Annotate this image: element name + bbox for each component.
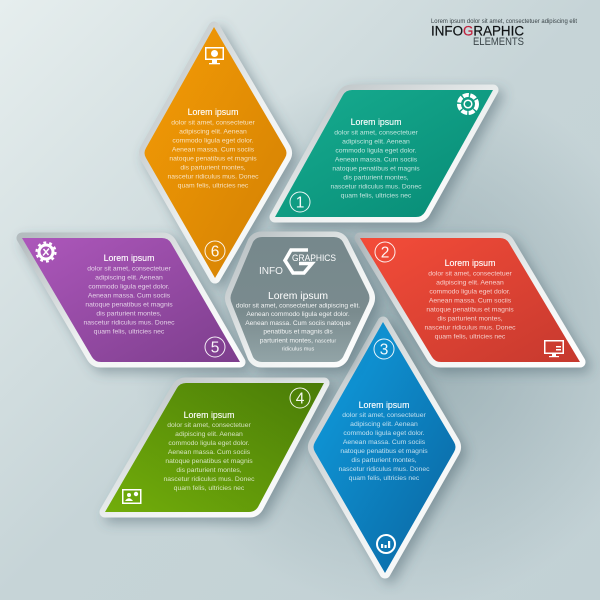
text: purple: dis parturient montes, [96,310,162,318]
text: green: quam felis, ultricies nec [174,485,245,492]
number 1: 1 [296,194,304,212]
number 1 [290,192,310,212]
text: teal: dis parturient montes, [343,174,409,182]
icon: monitor [205,47,224,64]
text: red: Lorem ipsum [445,258,495,268]
text: blue: nascetur ridiculus mus. Donec [338,466,430,473]
panel 6: orange diamond [144,27,286,278]
header tagline: Lorem ipsum dolor sit amet, consectetuer adipiscing elit [431,18,577,25]
text: purple [83,253,175,336]
text: blue: dis parturient montes, [351,457,417,464]
text: green: dolor sit amet, consectetuer [167,422,251,429]
header title: INFOGRAPHIC [431,24,524,38]
icon: cycle arrows [459,95,477,113]
text: purple: commodo ligula eget dolor. [88,284,170,290]
text: orange: nascetur ridiculus mus. Donec [167,174,259,180]
text: green: natoque penatibus et magnis [165,458,253,465]
hexagon text: ridiculus mus [282,346,315,352]
text: teal: nascetur ridiculus mus. Donec [330,184,422,190]
text: orange: quam felis, ultricies nec [178,182,249,190]
text: teal: Lorem ipsum [351,117,401,127]
text: teal: dolor sit amet, consectetuer [334,130,418,136]
hexagon text [236,291,360,352]
hexagon text: penatibus et magnis dis [263,329,333,336]
text: red: nascetur ridiculus mus. Donec [424,324,516,332]
hexagon text: parturient montes, nascetur [260,337,336,344]
text: blue: Lorem ipsum [359,400,409,410]
logo text: info: INFO [259,265,283,277]
text: orange: Aenean massa. Cum sociis [172,146,255,154]
number 5: 5 [211,340,219,356]
text: green: commodo ligula eget dolor. [168,440,250,447]
number 2: 2 [381,244,389,262]
hexagon text: Lorem ipsum [268,291,328,302]
text: blue: natoque penatibus et magnis [340,448,428,455]
panel 1: teal parallelogram [275,90,493,217]
text: teal [330,117,422,200]
text: green: Aenean massa. Cum sociis [168,449,251,456]
text: purple: natoque penatibus et magnis [85,302,173,308]
logo text: graphics: GRAPHICS [292,253,336,263]
text: green: nascetur ridiculus mus. Donec [163,476,255,483]
text: green: Lorem ipsum [184,410,234,420]
text: red [424,258,516,340]
text: red: dolor sit amet, consectetuer [428,270,512,278]
number 6: 6 [211,244,219,260]
text: teal: commodo ligula eget dolor. [335,148,417,154]
text: blue: commodo ligula eget dolor. [343,430,425,437]
text: orange: Lorem ipsum [188,107,238,117]
text: green: adipiscing elit. Aenean [175,431,243,438]
text: red: Aenean massa. Cum sociis [429,298,512,304]
hexagon text: dolor sit amet, consectetuer adipiscing elit. [236,302,360,310]
panel: central hexagon [230,237,370,362]
icon: presentation card [122,489,142,504]
text: red: adipiscing elit. Aenean [436,280,504,286]
text: purple: Lorem ipsum [104,253,154,263]
text: orange [167,107,259,190]
text: red: dis parturient montes, [437,316,503,322]
number 4: 4 [296,390,305,408]
header [431,18,577,48]
text: orange: commodo ligula eget dolor. [172,138,254,144]
text: purple: dolor sit amet, consectetuer [87,266,171,272]
text: purple: nascetur ridiculus mus. Donec [83,320,175,326]
text: blue: Aenean massa. Cum sociis [343,439,426,446]
number 3: 3 [380,342,388,358]
text: blue: adipiscing elit. Aenean [350,421,418,428]
header subtitle: ELEMENTS [473,36,524,48]
text: blue [338,400,430,482]
text: teal: quam felis, ultricies nec [341,192,412,200]
panel 3: blue diamond [314,322,456,573]
hexagon text: Aenean commodo ligula eget dolor. [246,311,350,318]
text: red: natoque penatibus et magnis [426,306,514,314]
text: teal: adipiscing elit. Aenean [342,138,410,146]
number 3 [374,339,394,359]
text: teal: Aenean massa. Cum sociis [335,156,418,164]
text: orange: dolor sit amet, consectetuer [171,120,255,126]
text: orange: natoque penatibus et magnis [169,156,257,162]
panel 5: purple parallelogram [22,238,240,362]
text: purple: adipiscing elit. Aenean [95,274,163,282]
text: blue: dolor sit amet, consectetuer [342,412,426,419]
hexagon text: Aenean massa. Cum sociis natoque [245,320,351,327]
text: blue: quam felis, ultricies nec [349,475,420,482]
number 2 [375,242,395,262]
text: green [163,410,255,492]
text: purple: Aenean massa. Cum sociis [88,292,171,300]
logo: hexagon G [285,250,312,273]
text: red: commodo ligula eget dolor. [429,288,511,296]
number 5 [205,337,225,357]
number 6 [205,241,225,261]
text: purple: quam felis, ultricies nec [94,328,165,336]
text: green: dis parturient montes, [176,467,242,474]
text: orange: adipiscing elit. Aenean [179,128,247,136]
panel 4: green parallelogram [105,383,324,512]
icon: monitor chart [544,340,564,357]
text: orange: dis parturient montes, [180,164,246,172]
icon: chart in circle [377,535,395,553]
number 4 [290,388,310,408]
text: red: quam felis, ultricies nec [435,334,506,340]
text: teal: natoque penatibus et magnis [332,166,420,172]
icon: gear [36,242,56,262]
panel 2: red parallelogram [360,238,580,362]
